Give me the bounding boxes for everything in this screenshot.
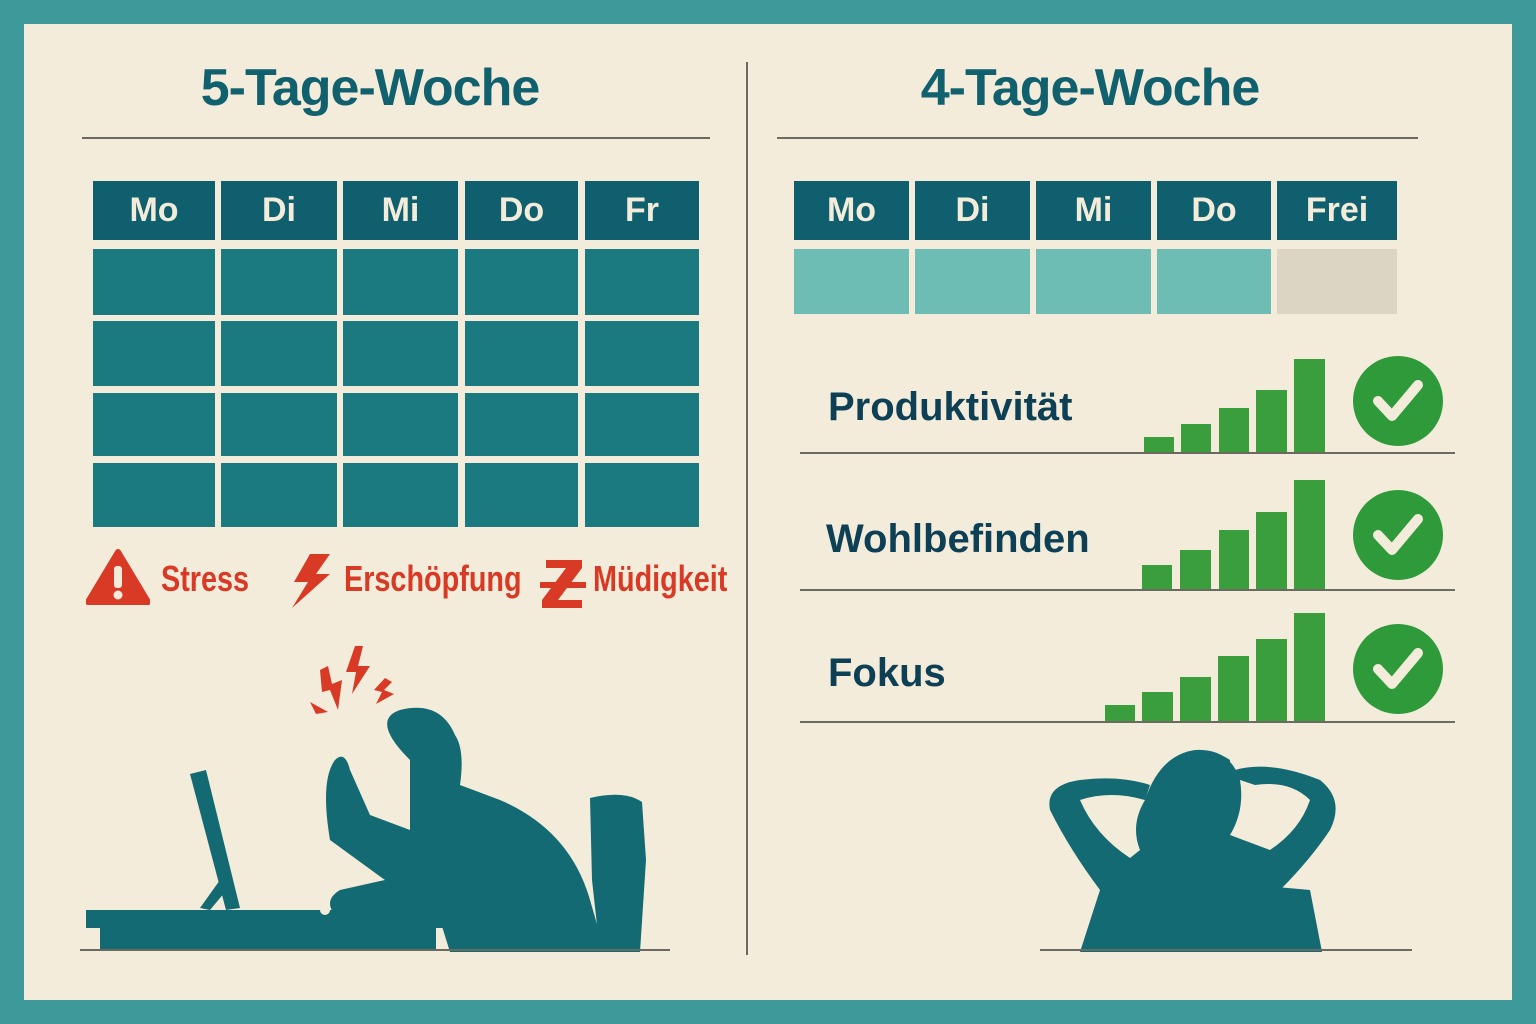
schedule: 5-day week: Mo [129,191,179,229]
schedule: 5-day week: Do [499,191,544,229]
metrics chart: Produktivität [828,385,1072,429]
schedule: 5-day week [93,181,699,527]
illustration: relaxed worker [1040,750,1412,952]
schedule: 5-day week: Mi [382,191,419,229]
warnings row: Stress [161,558,249,599]
schedule: 5-day week: Fr [625,191,659,229]
title: 5-Tage-Woche: 5-Tage-Woche [201,59,539,117]
metrics chart: Fokus [828,651,946,695]
icon: warning [86,549,150,605]
schedule: 4-day week: Mi [1075,191,1112,229]
schedule: 5-day week: Di [262,191,296,229]
metrics chart: Wohlbefinden [826,517,1090,561]
schedule: 4-day week: Do [1191,191,1237,229]
schedule: 4-day week [794,181,1397,314]
schedule: 4-day week: Frei [1306,191,1368,229]
warnings row: Erschöpfung [344,558,522,599]
schedule: 4-day week: Di [956,191,990,229]
divider [746,62,748,955]
metrics chart [800,356,1455,723]
title: 4-Tage-Woche: 4-Tage-Woche [921,59,1259,117]
illustration: stressed worker [80,646,670,952]
icon: Z [540,560,586,608]
warnings row [86,549,727,608]
icon: lightning [292,554,330,608]
schedule: 4-day week: Mo [827,191,876,229]
warnings row: Müdigkeit [593,558,727,599]
